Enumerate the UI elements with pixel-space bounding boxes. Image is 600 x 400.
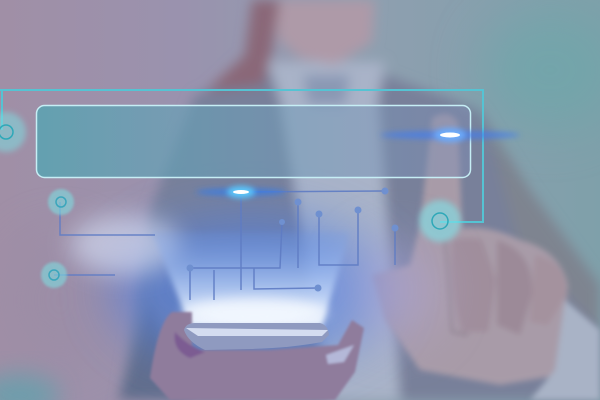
smartphone <box>184 323 329 350</box>
text banner frame <box>36 106 470 178</box>
circuit nodes <box>186 188 398 292</box>
ring node: fingertip <box>419 200 461 242</box>
lens flare: fingertip <box>380 128 520 142</box>
ring node: left edge <box>0 112 26 152</box>
ring node: upper left <box>48 189 74 215</box>
phone holding hand <box>150 312 364 400</box>
ring node: lower left <box>41 262 67 288</box>
lens flare: center <box>196 186 286 198</box>
glow from phone <box>70 215 440 365</box>
circuit traces <box>54 191 395 300</box>
hand pointing <box>372 114 600 400</box>
outer connector line <box>0 90 483 222</box>
